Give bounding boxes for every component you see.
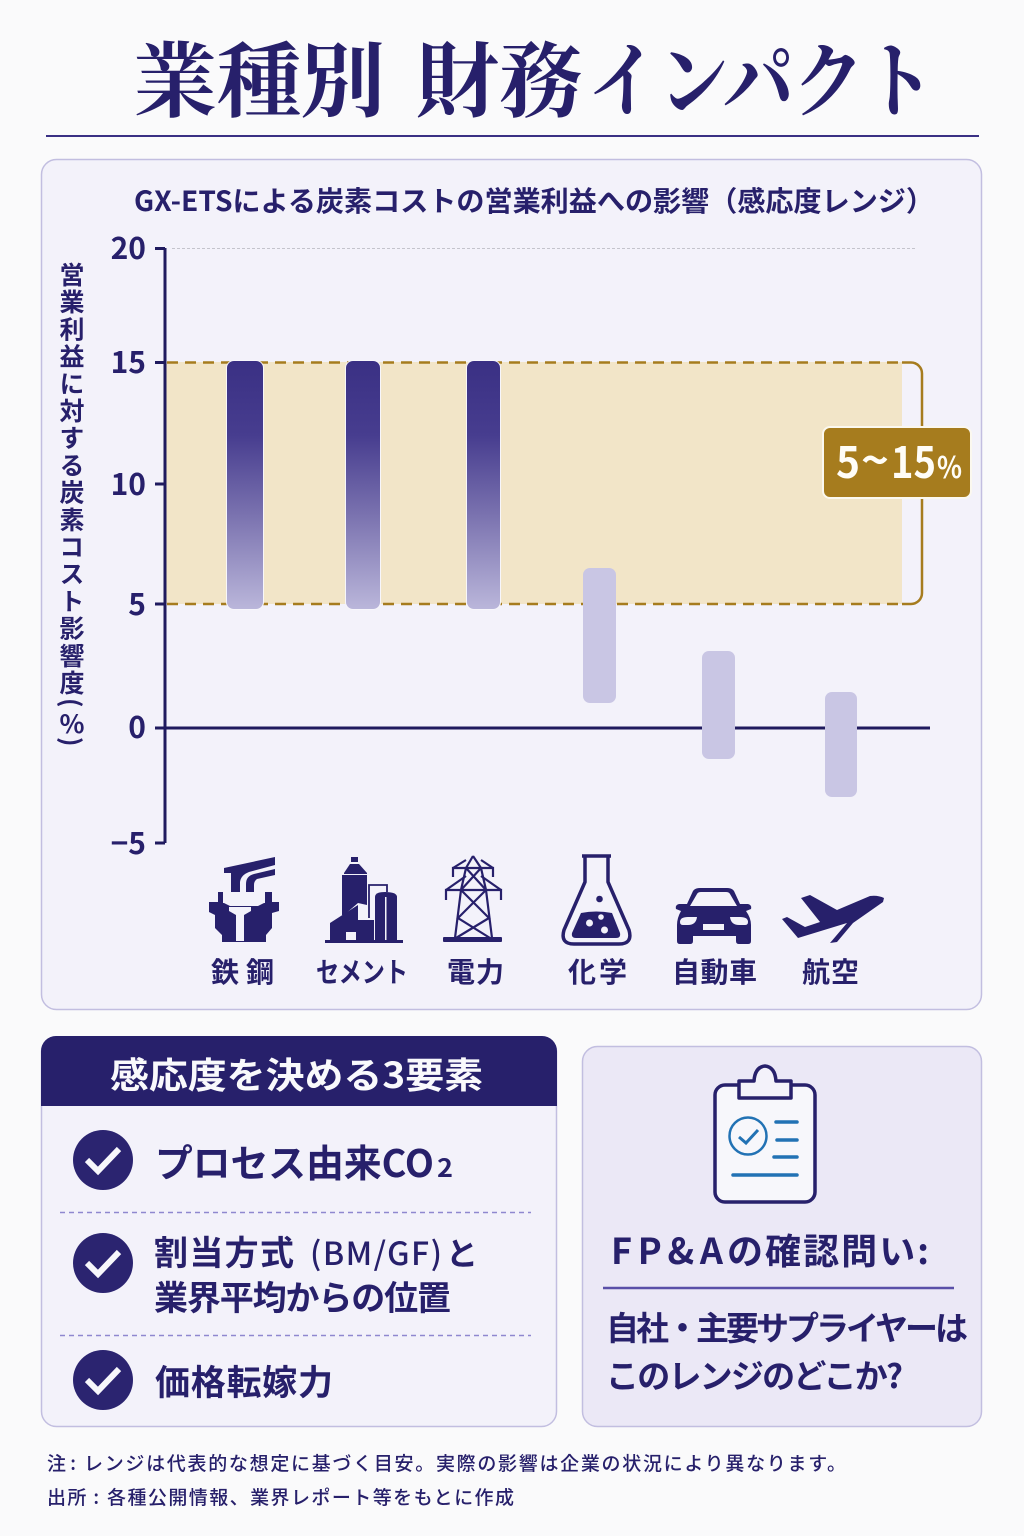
footnotes: 各種公開情報、業界レポート等をもとに作成 [107,1483,514,1510]
footnotes: 出所 : [47,1483,99,1510]
factor 1: プロセス由来CO [155,1133,434,1188]
factors header [41,1036,557,1106]
factor 2: と [446,1229,478,1275]
factor 1 [73,1130,453,1190]
icon: cement plant [325,857,403,943]
FP&A heading: の確認問い: [727,1223,929,1275]
y axis with ticks: 20 [111,224,146,268]
footnotes: レンジは代表的な想定に基づく目安。実際の影響は企業の状況により異なります。 [84,1449,846,1476]
factor 3: 価格転嫁力 [155,1355,333,1406]
y axis with ticks: 15 [111,338,146,382]
panel: FP&A question [582,1046,982,1426]
title: 業種別 [133,17,385,134]
panel: three factors [41,1036,557,1426]
y axis with ticks: 5 [128,580,146,624]
bars crossing zero [702,651,857,797]
bars [226,360,616,703]
range badge: 5 [836,429,860,491]
icon: steel [209,857,279,942]
sector labels [211,951,859,991]
factors header: 感応度を決める3要素 [110,1047,483,1099]
FP&A heading [611,1223,929,1275]
FP&A heading: FP&A [611,1223,724,1275]
title [46,17,979,137]
factor 3 [73,1350,333,1410]
range badge: % [937,443,962,487]
y axis label: 営業利益に対する炭素コスト影響度 [54,262,90,695]
sector labels: 化学 [568,951,627,991]
panel: chart [42,160,982,1010]
sector labels: 電力 [447,951,504,991]
range badge [823,427,971,498]
sector labels: 航空 [802,951,859,991]
title: 財務 [416,17,582,134]
title: インパクト [588,17,934,134]
y axis with ticks: 10 [111,460,146,504]
FP&A question text: 自社・主要サプライヤーは [606,1302,968,1350]
icon: power pylon [443,856,502,942]
y axis with ticks: −5 [111,819,146,863]
icon: clipboard [715,1066,815,1202]
footnotes [47,1449,846,1510]
factor 2: 業界平均からの位置 [154,1271,451,1320]
factor 2: (BM/GF) [310,1229,442,1275]
range badge: 15 [891,429,936,491]
y axis with ticks: 0 [128,703,146,747]
factor 2: 割当方式 [154,1226,294,1275]
y axis label: ( [54,698,90,707]
icon: flask [563,856,630,944]
FP&A question text [606,1302,968,1398]
icon: airplane [782,895,884,943]
factor 2 [73,1226,478,1320]
chart heading: GX-ETSによる炭素コストの営業利益への影響（感応度レンジ） [134,180,934,220]
icon: car [676,888,751,944]
sector labels: 自動車 [672,951,757,991]
y axis label: % [60,705,84,741]
zero line [155,726,930,730]
y axis label: ) [54,737,90,746]
y axis with ticks [111,224,917,863]
footnotes: 注 : [47,1449,76,1476]
sector labels: セメント [316,951,408,991]
sensitivity band 5-15% [165,362,922,604]
sector labels: 鉄鋼 [211,951,274,991]
factor 1: 2 [437,1149,453,1185]
range badge: ~ [861,427,889,489]
FP&A question text: このレンジのどこか? [606,1350,903,1398]
